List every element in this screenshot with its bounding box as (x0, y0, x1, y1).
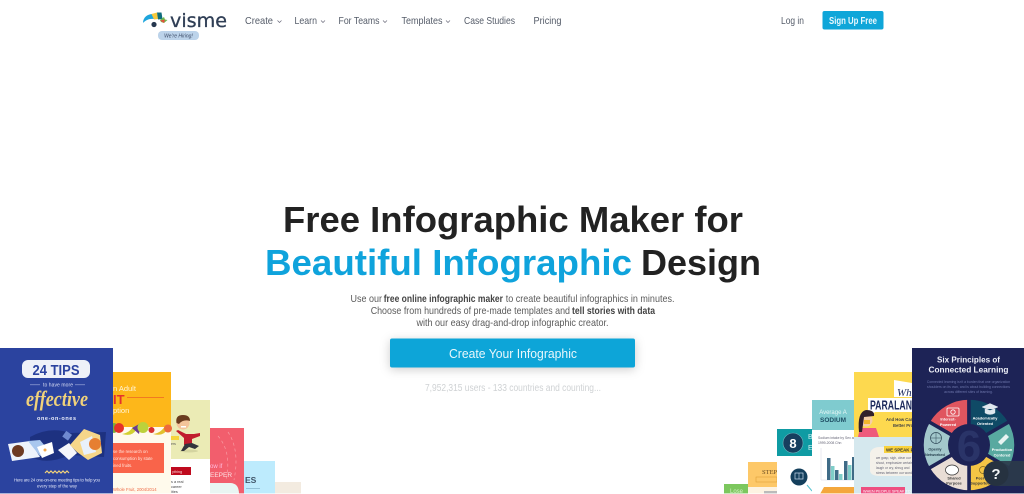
template card: sodium chart: 1999-2008 Chn (818, 441, 841, 445)
template card: cartoon runner: s a real (171, 480, 184, 484)
hero heading: Free Infographic Maker for (283, 199, 743, 240)
wheel labels: Oriented (977, 421, 994, 426)
template card: light blue (244, 461, 275, 494)
sign up button: Sign Up Free (829, 16, 877, 27)
hero description: Choose from hundreds of pre-made templates and (371, 305, 570, 317)
template card: coral: EEPER (210, 472, 232, 479)
template card: fruit consumption: IT (113, 392, 125, 407)
menu item: Create: Create (245, 15, 273, 27)
icon: fruit row (110, 422, 172, 436)
template card: coral (210, 428, 244, 494)
wheel labels: Centered (994, 452, 1011, 458)
card heading: Six Principles of (937, 354, 1000, 364)
pink label: WHEN PEOPLE SPEAK TO US (863, 490, 918, 494)
hero description: free online infographic maker (384, 293, 503, 305)
template card: 24 tips: one-on-ones (37, 416, 76, 422)
template card: cartoon runner: career (171, 485, 182, 489)
wheel labels (925, 416, 1013, 486)
zigzag ornament (45, 471, 69, 473)
hero description: with our easy drag-and-drop infographic creator. (416, 317, 608, 329)
icon: tools (998, 434, 1009, 445)
card title pill (22, 360, 90, 379)
quote panel: shout, emphasize certain words (876, 461, 923, 465)
template card: six principles (912, 348, 1024, 494)
wheel centre: 6 (957, 422, 981, 471)
template card: sodium chart: Average A (819, 410, 847, 416)
template card: cartoon runner: ities (171, 490, 178, 494)
card intro text: Connected learning isn't a burden that one organization (927, 380, 1010, 384)
wheel chart (922, 398, 1016, 492)
template card: paralanguage: And How Can Th (886, 417, 920, 422)
wheel labels: Shared (947, 476, 961, 480)
hero description: to create beautiful infographics in minutes. (506, 293, 674, 305)
logo mark (143, 12, 168, 27)
wheel labels: Powered (940, 422, 957, 427)
wheel segment: academically oriented (969, 398, 1010, 445)
template card: sodium chart: SODIUM (820, 417, 846, 424)
call to action button (390, 338, 635, 368)
icon: graduation cap (982, 404, 998, 414)
template card: cartoon runner (171, 400, 210, 494)
right template stack (724, 348, 1024, 494)
navigation bar (143, 10, 884, 40)
icon: speech bubble (946, 465, 958, 475)
menu item: Learn: Learn (294, 15, 317, 27)
template card: cartoon runner: ers (171, 442, 176, 446)
template card: 24 tips: every step of the way (37, 484, 78, 488)
icon: book circle (790, 468, 812, 491)
user counter: 7,952,315 users - 133 countries and counting... (425, 383, 601, 394)
template card: 24 tips: effective (26, 386, 88, 411)
quote panel: laugh or cry, shrug and (876, 466, 910, 470)
icon: number badge: 8 (789, 436, 797, 451)
template card: fruit consumption: consumption by state (113, 456, 153, 461)
menu item: Case Studies: Case Studies (464, 15, 515, 27)
wheel labels: Interest- (940, 416, 956, 422)
left template stack (0, 348, 301, 494)
sign up button (822, 11, 884, 30)
wheel labels: Networked (925, 452, 946, 457)
template card: green (724, 484, 748, 494)
card heading (928, 354, 1008, 374)
card intro text: shoulders on its own, and is about building connections (927, 385, 1010, 389)
icon: globe (930, 432, 942, 444)
quote panel: WE SPEAK PARAL (886, 448, 926, 452)
icon: people (980, 466, 986, 474)
hero heading: Design (641, 242, 761, 283)
template card: paralanguage: Better Pro (893, 423, 914, 428)
template card: dark teal: B (808, 434, 813, 441)
hero description: Use our (350, 293, 382, 305)
wheel segment: openly networked (922, 422, 969, 468)
template card: 24 tips: to have more (43, 382, 73, 388)
template card: steps: STEP (762, 469, 778, 476)
icon: camera (947, 408, 959, 416)
wheel labels: Openly (928, 446, 942, 452)
template card: fruit consumption (110, 372, 172, 494)
wheel labels: Academically (973, 416, 998, 420)
card title pill: 24 TIPS (32, 363, 80, 379)
card intro text: across different sites of learning. (944, 390, 993, 394)
template card: steps (748, 462, 778, 494)
wheel labels: Production (992, 447, 1013, 452)
hero heading: Beautiful Infographic (265, 242, 632, 283)
quote panel (870, 446, 926, 476)
template card: cartoon runner: ything (172, 470, 182, 474)
wheel segment: production centered (969, 422, 1016, 468)
template card: paralanguage (854, 372, 926, 494)
template card: sodium chart (812, 400, 864, 494)
wheel segment: peer supported (969, 445, 1010, 492)
template card: fruit consumption: Whole Fruit, 2004/2014 (113, 487, 157, 492)
quote panel: we gasp, sigh, clear our throats (876, 456, 922, 460)
template card: dark teal: E (808, 445, 813, 452)
template card: sodium chart: Sodium intake by Sex and Age (818, 436, 864, 440)
menu item: Pricing: Pricing (534, 15, 562, 27)
log in link: Log in (781, 15, 804, 27)
icon: woman portrait (858, 410, 879, 437)
hero description: tell stories with data (572, 305, 655, 317)
call to action button: Create Your Infographic (449, 347, 577, 361)
meeting illustration (8, 429, 106, 461)
template card: fruit consumption: n Adult (113, 384, 137, 393)
speech bubble: Wh (897, 387, 912, 399)
template card: fruit consumption: se the research on (113, 449, 148, 454)
help widget (984, 461, 1024, 486)
wheel labels: Peer (976, 476, 985, 480)
wheel segment: interest-powered (928, 398, 969, 445)
template card: beige (275, 482, 301, 494)
bar chart (821, 448, 854, 480)
wheel labels: Supported (970, 480, 990, 486)
help widget: ? (991, 466, 1001, 483)
logo (143, 10, 227, 40)
hero heading (265, 199, 761, 283)
template card: 24 tips: Here are 24 one-on-one meeting tips to help you (14, 478, 101, 482)
card intro text (927, 380, 1010, 394)
template card: light blue: ES (245, 475, 257, 485)
hiring badge: We're Hiring! (164, 34, 193, 40)
wheel labels: Purpose (946, 480, 963, 486)
logo wordmark: visme (170, 10, 227, 32)
template card: dark teal (777, 429, 813, 494)
icon: running man (176, 415, 200, 452)
menu item: For Teams: For Teams (338, 15, 380, 27)
template card: 24 tips (0, 348, 113, 494)
menu item: Templates: Templates (402, 15, 442, 27)
wheel segment: shared purpose (928, 445, 969, 492)
template card: fruit consumption: ined fruits. (113, 463, 132, 468)
hero description (350, 293, 674, 329)
quote panel: stress between our words (876, 471, 914, 475)
template card: fruit consumption: ption (113, 406, 129, 415)
card heading: Connected Learning (928, 364, 1008, 374)
template card: coral: ow if (210, 464, 223, 470)
headline banner: PARALAN (870, 398, 912, 412)
